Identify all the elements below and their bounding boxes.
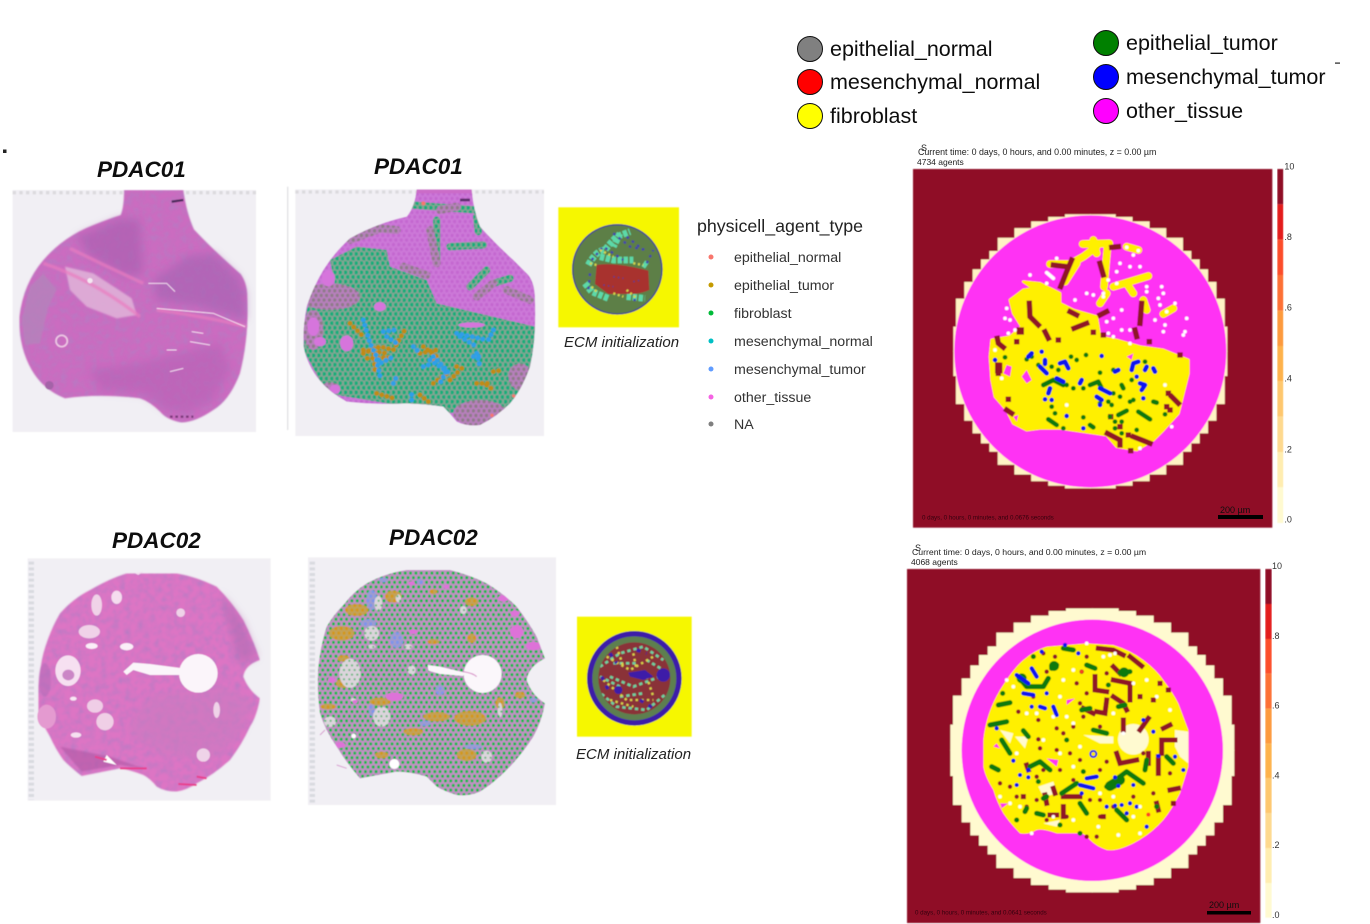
simulation footer: PDAC01 [922,505,1263,522]
heading: PDAC02 histology: PDAC02 [112,528,201,553]
panel: ECM initialization PDAC01 [558,207,679,327]
caption: ECM initialization: ECM initialization [576,746,691,763]
simulation header: PDAC02: 4068 agents [911,557,958,567]
heading: PDAC01 histology: PDAC01 [97,157,186,182]
simulation footer: PDAC02: 0 days, 0 hours, 0 minutes, and 0.0641 seconds [915,910,1047,916]
legend item: fibroblast: fibroblast [830,104,917,128]
panel: ECM initialization PDAC02 [577,617,692,737]
legend: physicell_agent_type: other_tissue [734,390,811,406]
legend item: mesenchymal_normal: mesenchymal_normal [830,70,1040,94]
legend item: mesenchymal_tumor: mesenchymal_tumor [1126,65,1326,89]
plot: agents over ECM field [913,169,1272,528]
simulation footer: PDAC01: 200 µm [1220,505,1250,515]
colorbar: PDAC01: .2 [1284,444,1292,454]
panel: simulation PDAC02 [907,569,1260,923]
panel: PDAC01 H&E tissue section [13,190,256,432]
colorbar: PDAC01: 10 [1284,161,1294,171]
legend item: other_tissue: other_tissue [1126,99,1243,123]
legend item: epithelial_tumor: epithelial_tumor [1126,31,1278,55]
colorbar: PDAC01 [1277,161,1294,525]
colorbar: PDAC02: .0 [1272,910,1279,920]
simulation header: PDAC01: Current time: 0 days, 0 hours, and 0.00 minutes, z = 0.00 µm [918,147,1156,157]
legend: physicell_agent_type: epithelial_normal [734,250,841,266]
panel: PDAC02 H&E tissue section [28,558,271,801]
caption: ECM initialization: ECM initialization [564,334,679,351]
colorbar: PDAC02: .6 [1272,701,1279,711]
simulation header: PDAC01: S [921,143,927,153]
colorbar: PDAC02: 10 [1272,561,1282,571]
colorbar: PDAC02: .2 [1272,840,1279,850]
simulation header: PDAC02 [911,543,1146,567]
simulation footer: PDAC02: 200 µm [1209,900,1239,910]
plot: agents over ECM field [907,569,1260,923]
legend item: fibroblast [798,104,917,128]
legend: physicell_agent_type: fibroblast [734,306,792,322]
colorbar: PDAC02 [1265,561,1282,920]
panel: simulation PDAC01 [913,169,1272,528]
legend: physicell_agent_type: physicell_agent_type [697,216,863,237]
colorbar: PDAC01: .8 [1284,232,1292,242]
simulation header: PDAC02: Current time: 0 days, 0 hours, and 0.00 minutes, z = 0.00 µm [912,547,1146,557]
legend: physicell_agent_type: epithelial_tumor [734,278,834,294]
simulation footer: PDAC01: 0 days, 0 hours, 0 minutes, and 0.0676 seconds [922,514,1054,522]
legend: physicell_agent_type: mesenchymal_tumor [734,362,866,378]
legend: physicell_agent_type [697,216,873,433]
colorbar: PDAC02: .4 [1272,770,1279,780]
simulation header: PDAC01 [917,143,1156,167]
legend item: epithelial_normal: epithelial_normal [830,37,993,61]
simulation header: PDAC02: S [915,543,921,553]
chart: ECM circle [587,631,682,726]
heading: PDAC02 spots: PDAC02 [389,525,478,550]
colorbar: PDAC01: .6 [1284,303,1292,313]
panel: PDAC01 spatial spot map [280,187,547,436]
panel: PDAC02 spatial spot map [300,557,567,805]
colorbar: PDAC01: .4 [1284,374,1292,384]
simulation footer: PDAC02 [915,900,1251,916]
chart: ECM circle [572,224,663,315]
legend: simulation cell types [798,30,1326,128]
legend: physicell_agent_type: mesenchymal_normal [734,334,873,350]
heading: PDAC01 spots: PDAC01 [374,154,463,179]
colorbar: PDAC01: .0 [1284,515,1292,525]
legend: physicell_agent_type: NA [734,417,754,433]
colorbar: PDAC02: .8 [1272,631,1279,641]
simulation header: PDAC01: 4734 agents [917,157,964,167]
